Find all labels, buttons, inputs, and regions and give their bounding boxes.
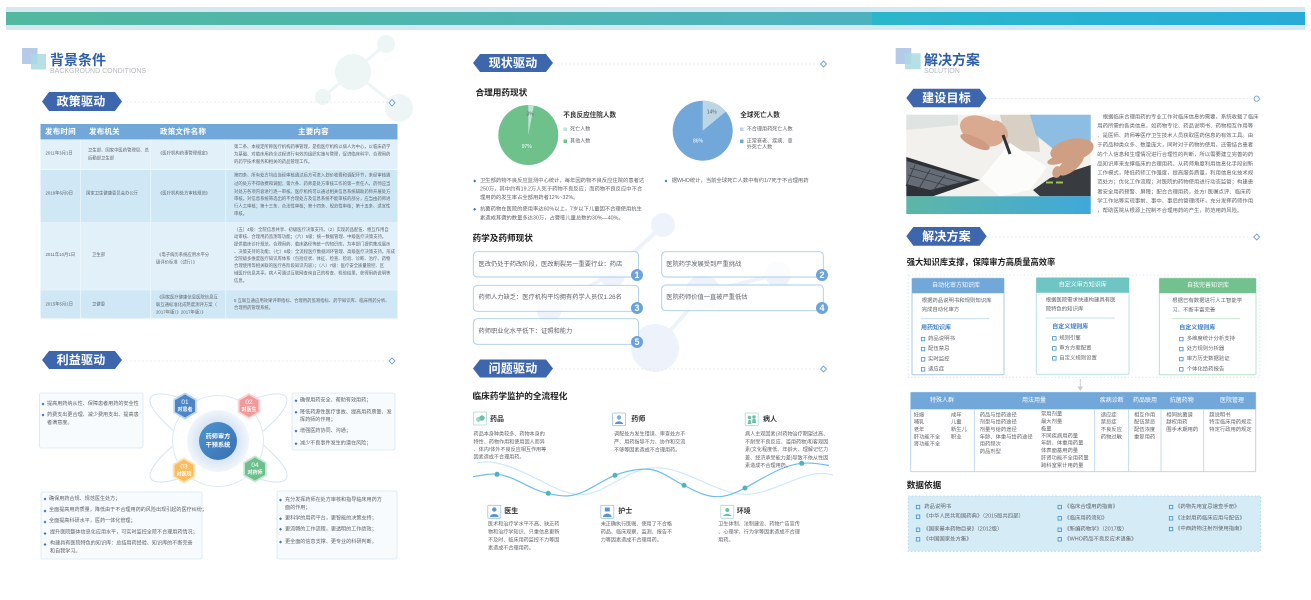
icon: medicine [474, 412, 486, 425]
section header: current status drive: 现状驱动 [489, 55, 537, 70]
table row: 2018 June [46, 172, 391, 217]
card: custom knowledge base: 自定义规则库 [1052, 323, 1088, 331]
table row: 2011 October: 全院级多维度医疗知识库体系（包括症状、体征、检查、检验、诊断、治疗、药物 [234, 255, 391, 262]
legend: adverse reaction admissions [563, 110, 616, 144]
text block: goal description: 品知识库来支撑临床的合理用药。从药师角度利用信息化手段创新 [1097, 159, 1254, 167]
data sources box: 《注射用药临床应用与配伍》 [1175, 513, 1245, 521]
icon: patient [745, 413, 758, 426]
text box: benefits for hospital [41, 492, 207, 559]
hexagon 02 doctor: 02 [245, 399, 253, 406]
upper hand [955, 109, 1011, 153]
hexagon 03 hospital: 03 [180, 464, 188, 470]
icon: pharmacist [612, 413, 626, 426]
knowledge base group [908, 275, 1260, 377]
card 5: 5 [634, 337, 640, 347]
item: patient: 素(文化程度低、年龄大、理解记忆力 [745, 446, 828, 453]
card 2: 医院药学发展受到严重挑战 [666, 259, 742, 268]
table row: 2018 June: 行人工审核；第十三条、合法性审核；第十四条、规范性审核；第十五条、适宜性 [234, 202, 391, 209]
card 3: 药师人力缺乏：医疗机构平均拥有药学人员仅1.26名 [478, 292, 622, 301]
card 1: 1 [634, 270, 640, 280]
item: environment [718, 505, 800, 544]
column: special populations: 职业 [951, 432, 962, 440]
table row: 2011 October: 级评价标准（试行）》 [156, 258, 197, 266]
column: special populations: 妊娠 [914, 410, 925, 418]
card 2 [662, 252, 828, 281]
card: custom knowledge base: 自定义审方知识库 [1059, 280, 1107, 288]
item: nurse: 护士 [618, 506, 632, 515]
heading: knowledge base support: 强大知识库支撑，保障审方高质量高效率 [907, 257, 1055, 267]
title: solution: 解决方案 [924, 52, 980, 68]
column: special populations: 老年 [914, 425, 925, 433]
text block: adverse reaction notes: 抗菌药物在医院的使用率达60%以上，7岁以下儿童因不合理使用抗生 [480, 204, 643, 212]
hexagon 01 patient [173, 392, 197, 420]
table row: 2011 October: 域医疗信息共享。病人可通过互联网查询自己的检查、检验结果，获得用药说明等 [234, 270, 391, 276]
table row: 2011 March: 卫生部、国家中医药管理局、总 [88, 146, 149, 154]
table row: 2018 June: 国家卫生健康委员会办公厅 [86, 190, 139, 196]
data sources box: 《药物先用宜忌速查手册》 [1175, 502, 1240, 510]
column: usage and dosage: 常用剂量 [1041, 409, 1063, 417]
table row: 2011 March [46, 143, 391, 165]
card 1 [473, 252, 643, 281]
data sources box: 《新编药物学》（2017版） [1064, 525, 1127, 533]
hexagon 02 doctor [238, 393, 260, 419]
item: nurse: 力等因素造成不合理用药。 [601, 537, 662, 544]
column: drug combination: 配伍浓度 [1134, 425, 1156, 433]
item: patient: 病人 [763, 414, 777, 423]
pie chart: adverse reaction admissions: 3% [526, 112, 534, 118]
column: usage and dosage: 肝肾功能不全用药量 [1041, 454, 1089, 462]
table row: 2011 March: 2011年3月1日 [46, 150, 73, 156]
item: patient: 病人主观因素(对药物治疗期望过高、 [745, 430, 828, 437]
section header: problem drive [473, 360, 826, 378]
column: hospital management: 超说明书 [1209, 410, 1231, 418]
table header row: 政策文件名称 [160, 126, 206, 136]
text block: goal description: 用药所需的各类信息，如药物专论、药品说明书、药物相互作用等 [1097, 122, 1254, 130]
card: self-improving knowledge base: 多维度统计分析支持 [1187, 334, 1236, 342]
text box: benefits for pharmacists: 充分发挥药师在处方审核和指导临床用药方 [285, 496, 382, 503]
text block: goal description: 范处方；优化工作流程；对医院的药物使用进行动态监管；构建患 [1097, 178, 1254, 186]
rule table header: 抗菌药物 [1170, 396, 1194, 404]
text box: benefits for hospital: 构建具有医院特色的知识库：总结用药经验、知识库的不断完善 [50, 540, 193, 547]
table row: 2018 June: 审核。 [234, 210, 247, 217]
photo: hands writing with calculator and keyboard [906, 109, 1096, 214]
column: diagnosis: 禁忌症 [1101, 418, 1117, 426]
text box: benefits for doctors: 确保用药安全、帮助有效用药； [300, 397, 371, 404]
column: antibacterials: 围手术期用药 [1166, 425, 1198, 433]
column: usage and dosage: 最大剂量 [1041, 417, 1063, 425]
item: nurse [601, 505, 672, 544]
card: self-improving knowledge base: 自我完善知识库 [1187, 281, 1229, 289]
card: custom knowledge base [1036, 278, 1129, 374]
card 4: 4 [819, 303, 825, 313]
pie chart: global deaths [673, 101, 733, 161]
table row: 2011 March: 的药学技术服务和相关的药品管理工作。 [234, 158, 312, 165]
column: usage and dosage: 年龄、体重用药量 [1041, 439, 1084, 447]
item: medicines: 、体内/体外不良反应相互作用等 [474, 446, 546, 453]
item: nurse: 未正确执行医嘱、使用了不合格 [601, 521, 672, 528]
heading: pharmacy and pharmacists: 药学及药师现状 [472, 232, 533, 243]
text box: benefits for hospital: 和自我学习。 [50, 548, 81, 555]
heading: data sources: 数据依据 [907, 479, 942, 490]
column: usage and dosage: 极量 [1041, 425, 1052, 433]
item: pharmacist: 不够等因素造成不合理用药。 [614, 446, 680, 453]
section header: construction goal [906, 89, 1259, 107]
table row: 2011 October: 、决策支持的功能；（七）6级：全流程医疗数据闭环管理、高级医疗决策支持。形成 [234, 248, 396, 255]
text block: goal description: 者安全用药预警、屏障；配合合理用药，处方/ 医嘱点评、临床药 [1097, 187, 1251, 195]
table row: 2018 June: 对处方各项内容进行逐一审核。医疗机构可以通过相关信息系统辅助药师开展处方 [234, 188, 391, 195]
text box: benefits for pharmacists [277, 491, 397, 559]
section header: benefit drive [42, 351, 395, 369]
table row: 2011 October [46, 226, 396, 284]
column: special populations: 肾功能不全 [914, 440, 941, 448]
table row: 2011 October: 2011年10月1日 [46, 251, 75, 258]
title: background conditions: BACKGROUND CONDITIONS [50, 68, 146, 75]
text box: benefits for pharmacists: 更全面的信息支撑、更专业的科研判断。 [285, 538, 377, 545]
section header: solution: 解决方案 [922, 228, 971, 243]
data sources box [908, 496, 1261, 551]
pie chart: adverse reaction admissions [498, 105, 558, 165]
legend: global deaths: 全球死亡人数 [740, 110, 780, 119]
text box: benefits for patients: 药费支出更合理、减少费用支出、提高患 [47, 411, 139, 418]
card 1: 医改仍处于药改阶段，医改割裂另一重要行业：药店 [478, 259, 622, 268]
column: usage and dosage: 年龄、体重与给药途径 [980, 432, 1033, 440]
rule table header [930, 396, 1244, 404]
column: usage and dosage: 药品与给药途径 [980, 410, 1017, 418]
text block: goal description: ，帮助医院从根源上控制不合理用药的产生，防范用药风险。 [1097, 206, 1242, 214]
table row: 2018 June: 《医疗机构处方审核规范》 [158, 190, 210, 196]
card: automated knowledge base: 根据药品说明书和规则知识库 [922, 296, 992, 304]
card 4 [662, 285, 828, 314]
table row: 2011 October: 动审核、合理用药监测等功能；（六）5级：统一数据管理、中级医疗决策支持。 [234, 233, 386, 240]
hexagon 04 pharmacist [243, 456, 267, 482]
text box: benefits for pharmacists: 面的作用； [285, 504, 310, 511]
text box: benefits for doctors: 挥药师的作用； [300, 416, 336, 423]
column: antibacterials [1166, 410, 1198, 433]
table row: 2015 May [46, 294, 390, 316]
card: self-improving knowledge base: 根据已有数据进行人工智能学 [1172, 296, 1243, 304]
card 3 [473, 285, 643, 314]
item: medicines: 药品 [490, 414, 504, 423]
section header: problem drive: 问题驱动 [489, 362, 537, 376]
text block: adverse reaction notes: 250万，其中约有19.2万人死于药物不良反应；而药物不良反应中不合 [480, 185, 643, 193]
text block: adverse reaction notes: 卫生部药物不良反应监测中心统计，每年因药物不良反应住院的患者达 [480, 176, 645, 184]
table row: 2015 May: 卫健委 [92, 300, 106, 308]
table row: 2015 May: 联互通标准化成熟度测评方案（ [156, 301, 217, 308]
card: self-improving knowledge base: 自定义规则库 [1179, 323, 1215, 331]
card: self-improving knowledge base: 习、不断丰富完善 [1172, 305, 1216, 313]
item: patient: 素造成不合理用药。 [745, 462, 791, 469]
section header: construction goal: 建设目标 [922, 90, 971, 105]
text block: goal description: 工作模式，降低药师工作强度，提高服务质量，利用信息化技术规 [1097, 169, 1254, 177]
item: patient: 不耐受不良反应、滥用药物)和客观因 [745, 438, 828, 445]
column: usage and dosage: 药品剂型 [980, 447, 1002, 455]
orbit diagram [140, 380, 297, 496]
text box: benefits for doctors: 减少不良事件发生的潜在风险； [300, 440, 371, 447]
card: automated knowledge base: 配伍禁忌 [928, 344, 950, 352]
table row: 2011 October: 信息。 [234, 277, 247, 284]
table row: 2018 June: 2018年6月9日 [46, 190, 73, 196]
card 5: 药师职业化水平低下：证照和能力 [478, 326, 572, 335]
title: solution: SOLUTION [924, 68, 960, 75]
text block: goal description: 根据临床合理用药的专业工作对临床信息的需要，系统收载了临床 [1103, 112, 1259, 120]
item: nurse: 药品、临床观察、监测、报告不 [601, 529, 672, 536]
text box: benefits for doctors: 增强医药协同、沟通； [300, 427, 351, 434]
column: special populations: 肝功能不全 [914, 432, 941, 440]
card 3: 3 [634, 303, 640, 313]
column: usage and dosage: 剂量与给药途径 [980, 425, 1017, 433]
column: special populations: 哺乳 [914, 418, 925, 426]
column: diagnosis [1101, 410, 1123, 440]
card: automated knowledge base [912, 278, 1004, 375]
hexagon 04 pharmacist: 04 [251, 462, 259, 469]
card: automated knowledge base: 药品说明书 [928, 334, 955, 342]
item: pharmacist: 调配处方发生错误、审查处方不 [614, 430, 685, 437]
item: doctor: 素造成不合理用药。 [488, 544, 534, 551]
rule table header: 用法用量 [1022, 396, 1046, 404]
table row: 2011 March: 《医疗机构药事管理规定》 [158, 150, 210, 156]
item: doctor: 医生 [504, 506, 518, 515]
section header: policy drive [42, 92, 395, 111]
table row: 2015 May: 合理用药管理系统。 [234, 304, 273, 311]
text block: goal description: 于药品种类众多、数量庞大，同时对于药物的使用，还需结合患者 [1097, 141, 1254, 149]
item: medicines [474, 412, 546, 461]
hexagon 03 hospital [173, 458, 195, 484]
hexagon 03 hospital: 对医院 [176, 470, 192, 478]
column: diagnosis: 药物过敏 [1101, 432, 1123, 440]
section header: benefit drive: 利益驱动 [57, 352, 105, 367]
text box: benefits for hospital: 全面提高科研水平，医药一体化管理； [49, 517, 136, 524]
card: custom knowledge base: 自定义规则设置 [1059, 353, 1098, 361]
column: usage and dosage: 跨科室累计用药量 [1041, 461, 1084, 469]
text block: adverse reaction notes: 素造成耳聋的数量多达30万，占聋哑儿童总数的30%—40%。 [480, 213, 624, 221]
card: custom knowledge base: 根据医院需求快速构建具有医 [1046, 296, 1116, 304]
table row: 2015 May: 5 互联互通应用效果评审指标、合理用药监测指标、药学知识库、临床用药分析、 [234, 297, 390, 304]
column: diagnosis: 适应症 [1101, 410, 1117, 418]
text box: benefits for hospital: 提升医院整体信息化应用水平，可实时监控全院不合理用药情况； [50, 528, 198, 535]
data sources box: 《国家基本药物目录》（2012版） [923, 525, 1002, 533]
legend: adverse reaction admissions: 其他人数 [570, 137, 590, 144]
rule category table [911, 392, 1256, 472]
data sources box: 《中西药物注射剂使用指南》 [1175, 524, 1245, 532]
card: automated knowledge base: 自动化审方知识库 [932, 281, 980, 289]
arrow: knowledge base to rules [1078, 379, 1083, 391]
card 5 [473, 319, 643, 348]
text block: goal description: 、是医师、药师等医疗卫生技术人员获取医药信息的有效工具。由 [1097, 131, 1253, 139]
text block: adverse reaction notes [473, 176, 645, 221]
card: self-improving knowledge base: 个体化给药报告 [1187, 364, 1225, 372]
item: doctor [488, 505, 559, 551]
item: medicines: 特性、药物作用和使用因人而异 [474, 438, 545, 445]
card 2: 2 [819, 270, 825, 280]
center node [199, 422, 237, 460]
column: diagnosis: 不良反应 [1101, 425, 1123, 433]
calculator [1033, 165, 1091, 196]
icon: environment [721, 505, 734, 518]
card: automated knowledge base: 完成自动化审方 [922, 305, 960, 313]
table row: 2011 March: 为基础、对临床用药全过程进行有效的组织实施与管理，促进临床科学、合理用药 [234, 150, 391, 158]
text box: benefits for patients [40, 393, 143, 448]
text box: benefits for hospital: 确保用药合规、规范医生处方； [49, 495, 120, 502]
data sources box: 《临床用药须知》 [1064, 513, 1107, 521]
column: drug combination [1134, 410, 1156, 440]
text block: WHO note: 据WHO统计，当前全球死亡人数中有约1/7死于不合理用药 [672, 176, 809, 184]
text box: benefits for patients: 提高用药纳从性、保障患者用药的安全性 [47, 400, 139, 407]
text box: benefits for pharmacists: 更科学的用药平台，更智能的决策支持； [285, 515, 377, 522]
column: usage and dosage [980, 409, 1089, 469]
item: environment: 、心理学、行为学等因素造成不合理 [718, 529, 800, 536]
card: custom knowledge base: 院特色的知识库 [1046, 304, 1084, 312]
table header row: 发布时间 [45, 126, 76, 136]
text block: goal description [1097, 112, 1259, 214]
column: antibacterials: 相同抗菌谱 [1166, 410, 1193, 418]
item: pharmacist: 严、用药指导不力、协作和交流 [614, 438, 685, 445]
column: drug combination: 重复用药 [1134, 432, 1155, 440]
section header: solution [906, 227, 1260, 246]
hexagon 01 patient: 对患者 [177, 406, 193, 413]
data sources box: 《中国国家处方集》 [923, 534, 972, 542]
table header row: 发布机关 [89, 126, 120, 136]
item: doctor: 物和治疗学知识、只重信息更新 [488, 529, 559, 536]
column: hospital management: 特定行政用药规定 [1209, 425, 1252, 433]
icon: nurse [601, 505, 614, 518]
legend: adverse reaction admissions: 不良反应住院人数 [563, 110, 616, 119]
card: self-improving knowledge base [1159, 278, 1256, 375]
legend: global deaths: 正常衰老、疾病、意 [747, 137, 793, 144]
text block: goal description: 的个人信息和生理情况进行合理性的判断，所以需要建立完善的药 [1097, 150, 1254, 158]
pie chart: global deaths: 86% [693, 139, 704, 145]
table row: 2011 October: 卫生部 [92, 251, 106, 258]
item: medicines: 药品本身种类较多、药物本身的 [474, 430, 545, 437]
item: medicines: 因素造成不合理用药。 [474, 454, 524, 461]
column: special populations: 新生儿 [951, 425, 968, 433]
column: special populations [914, 410, 968, 448]
table row: 2011 October: 合理使用等相关联的医疗各阶段知识内容）；（八）7级：医疗安全质量管控、区 [234, 262, 385, 269]
title: solution [896, 48, 980, 75]
table row: 2015 May: 2015年5月1日 [46, 300, 73, 308]
item: environment: 卫生体制、法制建设、药物广告宣传 [718, 521, 800, 528]
pie chart: adverse reaction admissions: 97% [522, 144, 532, 150]
item: environment: 用药。 [718, 537, 734, 544]
column: drug combination: 配伍禁忌 [1134, 418, 1155, 426]
title: background conditions: 背景条件 [50, 52, 106, 68]
card: self-improving knowledge base: 审方历史数据验证 [1187, 354, 1230, 362]
wave timeline [473, 461, 833, 497]
heading: clinical monitoring: 临床药学监护的全流程化 [472, 390, 568, 401]
text box: benefits for patients: 者满意度。 [47, 419, 72, 426]
item: patient: 差、经济承受能力差)导致不依从性因 [745, 454, 828, 461]
table row: 2011 October: 提供临床诊疗规范、合理用药、临床路径等统一的知识库，为本部门提供集成展示 [234, 240, 391, 248]
rule table header: 疾病诊断 [1100, 396, 1124, 404]
keyboard [906, 157, 980, 196]
card 4: 医院药师价值一直被严重低估 [666, 292, 748, 301]
icon: doctor [488, 505, 501, 518]
data sources box: 《临床合理用药指南》 [1064, 502, 1118, 510]
section header: policy drive: 政策驱动 [57, 94, 105, 108]
table header row [45, 126, 329, 136]
table row: 2011 March: 后勤部卫生部 [88, 154, 115, 162]
hexagon 01 patient: 01 [181, 399, 189, 406]
column: hospital management: 特定临床用药规定 [1209, 418, 1252, 426]
table row: 2015 May: 2017年版）》2017年版）》 [156, 308, 206, 316]
lower hand [1046, 135, 1096, 180]
item: doctor: 医术和治疗学水平不高、缺乏药 [488, 521, 559, 528]
text box: benefits for doctors: 降低药源性医疗事故、提高用药质量、发 [300, 408, 392, 415]
text block: goal description: 学工作站等实现事前、事中、事后的管理闭环，充分发挥药师作用 [1097, 196, 1253, 204]
item: pharmacist [612, 413, 685, 453]
legend: global deaths: 外死亡人数 [747, 143, 772, 150]
legend: adverse reaction admissions: 死亡人数 [570, 125, 590, 132]
column: usage and dosage: 用药频次 [980, 440, 1002, 448]
text box: benefits for pharmacists: 更流畅的工作流程，更透明的工作绩效； [285, 525, 377, 532]
top banner [6, 7, 1305, 30]
data sources box: 药品说明书 [924, 502, 952, 510]
table row: 2011 October: 《电子病历系统应用水平分 [157, 251, 210, 258]
item: pharmacist: 药师 [631, 414, 645, 423]
card: self-improving knowledge base: 处方规则分析器 [1187, 344, 1225, 352]
title: background conditions [22, 48, 146, 75]
column: antibacterials: 越权用药 [1166, 418, 1188, 426]
rule table header: 药品联用 [1133, 396, 1157, 404]
pie chart: global deaths: 14% [707, 110, 717, 116]
legend: global deaths: 不合理用药死亡人数 [747, 125, 793, 132]
text box: benefits for doctors [292, 393, 395, 450]
policy table [40, 124, 398, 318]
item: environment: 环境 [737, 506, 751, 515]
data sources box: 《WHO药品不良反应术语集》 [1064, 534, 1137, 542]
table row: 2018 June: 审核。对信息系统筛选出的不合理处方及信息系统不能审核的部分，应当由药师进 [234, 195, 391, 202]
hexagon 02 doctor: 对医生 [241, 406, 257, 413]
center node: 药师审方 [206, 432, 230, 440]
card: custom knowledge base: 规则引擎 [1059, 333, 1081, 341]
table row: 2018 June: 第四条、所有处方均应当经审核通过后方可进入划价收费和调配环节，未经审核通 [234, 172, 391, 178]
table row: 2011 October: （五）4级：全院信息共享、初级医疗决策支持。（2）实现药品配伍、相互作用自 [234, 226, 389, 233]
rule table header: 医院管理 [1220, 396, 1244, 404]
text box: benefits for hospital: 全面提高用药质量，降低由于不合理用药的风险出现引起的医疗纠纷； [49, 506, 207, 513]
column: hospital management [1209, 410, 1252, 433]
card: automated knowledge base: 适应症 [928, 364, 945, 372]
heading: rational drug use: 合理用药现状 [476, 87, 528, 98]
column: usage and dosage: 体表面基用药量 [1041, 446, 1079, 454]
item: doctor: 不及时、临床用药监控不力等因 [488, 537, 559, 544]
center node: 干预系统 [206, 441, 231, 449]
legend: global deaths [740, 110, 793, 150]
data sources box: 《中华人民共和国药典》（2015版共四部） [923, 512, 1024, 520]
column: special populations: 成年 [951, 410, 962, 418]
hexagon 04 pharmacist: 对药师 [247, 469, 263, 476]
table row: 2018 June: 过的处方不得收费和调配；第六条、药师是处方审核工作的第一责任人。药师应当 [234, 180, 390, 187]
section header: current status drive [473, 54, 826, 72]
table row: 2011 March: 第二条、本规定所称医疗机构药事管理，是指医疗机构以病人为中心，以临床药学 [234, 143, 391, 150]
table row: 2015 May: 《国家医疗健康信息医院信息互 [157, 294, 218, 300]
status cards [473, 252, 828, 348]
text block: adverse reaction notes: 理用药的发生率占全部用药者12%~32%。 [480, 193, 578, 201]
column: usage and dosage: 剂型与给药途径 [980, 418, 1017, 426]
decorative molecule: center column [537, 213, 791, 372]
card: automated knowledge base: 用药知识库 [921, 323, 951, 331]
column: special populations: 儿童 [951, 418, 962, 426]
item: patient [745, 413, 828, 469]
card: custom knowledge base: 审方方案配置 [1059, 343, 1092, 351]
column: usage and dosage: 不同疾病用药量 [1041, 432, 1079, 440]
decorative molecule: background section [315, 35, 413, 122]
column: drug combination: 相互作用 [1134, 410, 1155, 418]
card: automated knowledge base: 实时监控 [928, 354, 950, 362]
rule table header: 特殊人群 [930, 396, 954, 404]
table header row: 主要内容 [298, 126, 329, 136]
